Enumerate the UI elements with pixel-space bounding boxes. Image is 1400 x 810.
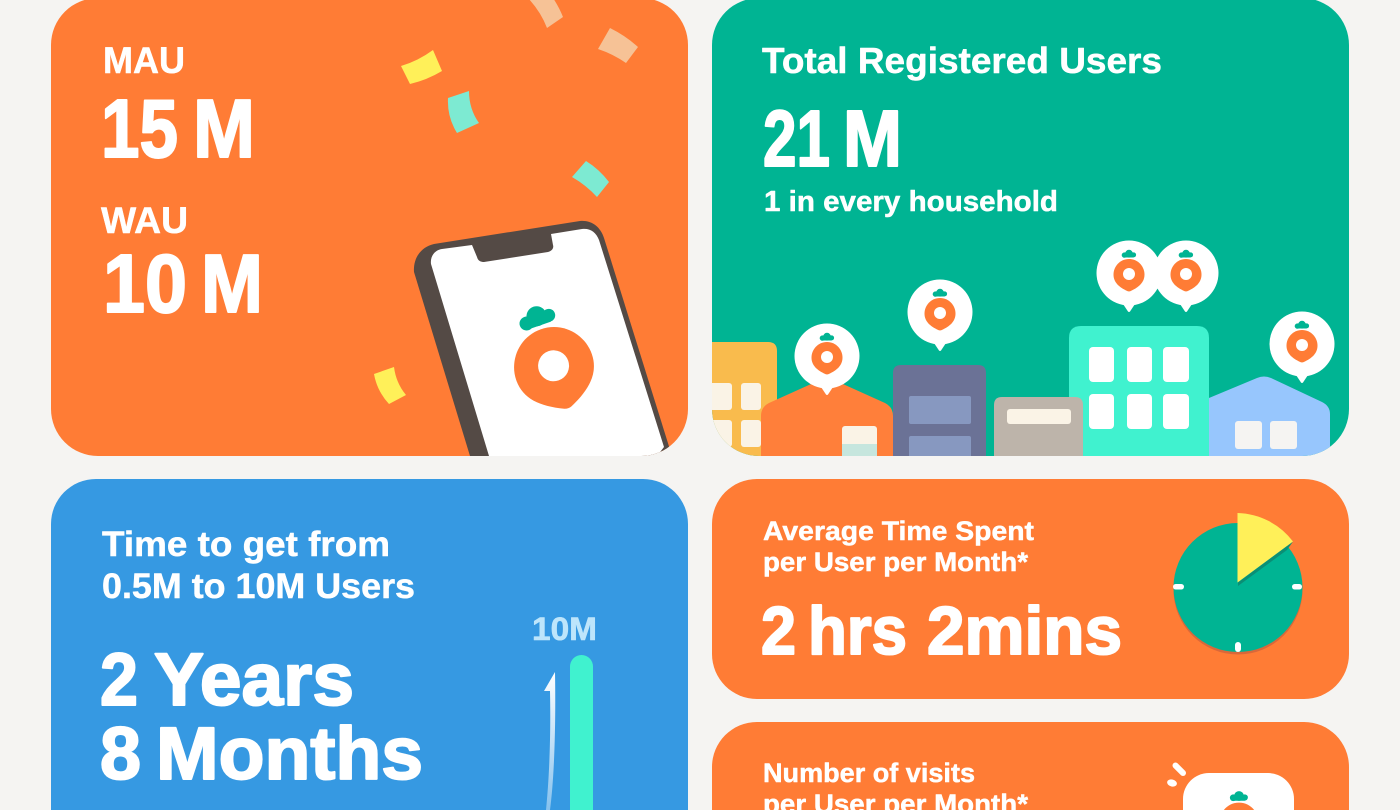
- panel: average time spent: [712, 479, 1349, 699]
- heading: WAU: WAU: [101, 200, 188, 241]
- illustration: phone with logo: [414, 221, 672, 456]
- map pins: [794, 240, 1334, 395]
- number: 2 Years 8 Months: 2: [100, 638, 138, 721]
- confetti: [374, 0, 638, 404]
- number: 2 Years 8 Months: 8: [100, 712, 141, 795]
- heading: per User per Month*: [763, 547, 1029, 577]
- building: yellow: [712, 342, 777, 456]
- number: 2 Years 8 Months: Months: [156, 712, 423, 795]
- heading: Time to get from: [102, 525, 390, 564]
- icon: app tile: [1183, 773, 1294, 810]
- number: 2hrs 2mins: 2mins: [927, 593, 1122, 669]
- number: 10M: [103, 237, 263, 330]
- number: 2 Years 8 Months: [100, 638, 423, 795]
- growth arrow: [544, 672, 555, 810]
- panel: total registered users: [700, 0, 1349, 460]
- number: 2 Years 8 Months: Years: [154, 638, 354, 721]
- number: 2hrs 2mins: hrs: [808, 593, 907, 669]
- building: taupe: [994, 397, 1083, 456]
- number: 21M: M: [843, 94, 902, 183]
- heading: MAU: MAU: [103, 40, 185, 81]
- number: 10M: 10: [103, 237, 187, 330]
- building: blue house: [1209, 376, 1330, 456]
- heading: Average Time Spent: [763, 516, 1034, 546]
- heading: Total Registered Users: [762, 40, 1162, 81]
- heading: [763, 516, 1034, 577]
- heading: 0.5M to 10M Users: [102, 567, 415, 606]
- heading: [763, 758, 1029, 810]
- heading: [102, 525, 415, 606]
- building: orange house: [761, 384, 893, 456]
- heading: Number of visits: [763, 758, 975, 788]
- number: 15M: [101, 82, 255, 175]
- building: teal: [1069, 326, 1209, 456]
- panel: number of visits: [712, 722, 1349, 810]
- illustration: neighbourhood buildings: [700, 240, 1334, 460]
- number: 2hrs 2mins: 2: [761, 593, 796, 669]
- number: 2hrs 2mins: [761, 593, 1122, 669]
- number: 10M: M: [201, 237, 263, 330]
- number: 15M: M: [193, 82, 255, 175]
- building: navy: [893, 365, 986, 460]
- number: 21M: [763, 94, 902, 183]
- panel: time to 10M users: [51, 479, 688, 810]
- icon: sparkles: [1166, 766, 1183, 788]
- number: 21M: 21: [763, 94, 830, 183]
- icon: clock: [1173, 513, 1302, 654]
- chart label: 10M: 10M: [532, 611, 597, 647]
- chart bar: [570, 655, 593, 810]
- panel: MAU and WAU: [51, 0, 688, 456]
- number: 15M: 15: [101, 82, 178, 175]
- subheading: 1 in every household: [764, 186, 1058, 218]
